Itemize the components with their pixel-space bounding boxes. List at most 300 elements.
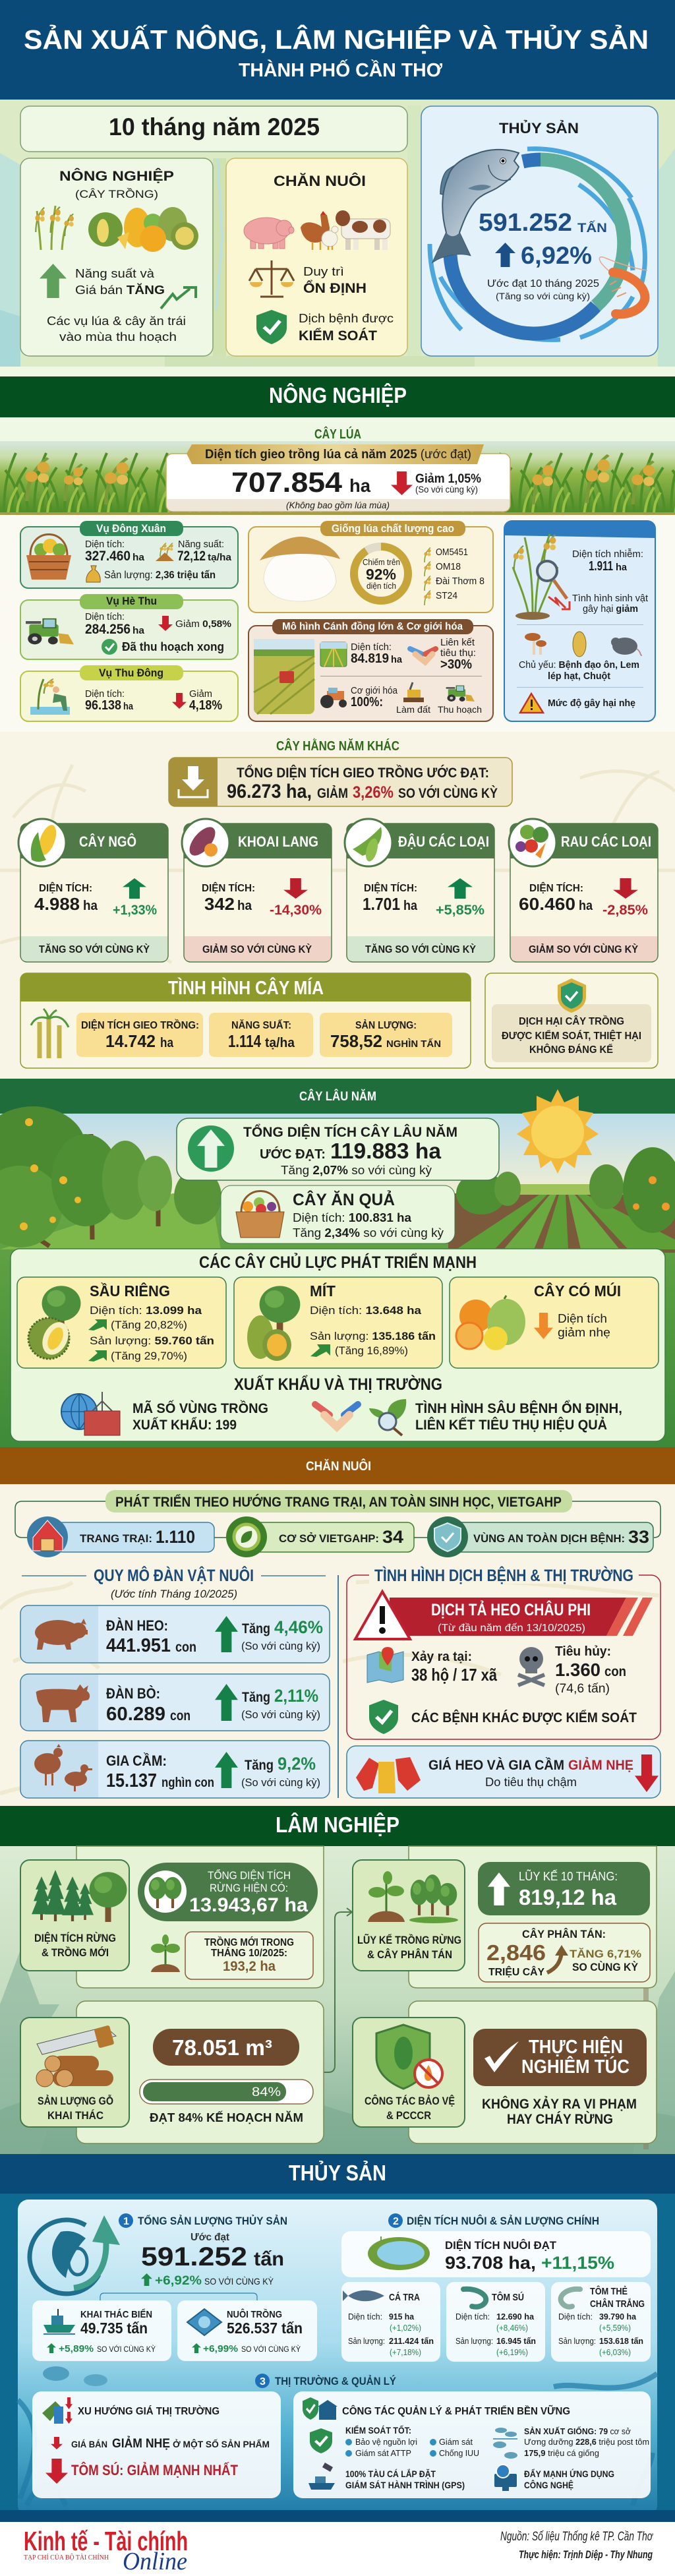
icon: pig bbox=[244, 218, 294, 249]
area value: 915 ha bbox=[389, 2312, 415, 2321]
label: Cơ giới hóa bbox=[351, 685, 398, 696]
area: Diện tích: bbox=[348, 2312, 382, 2321]
value: 526.537 tấn bbox=[227, 2320, 303, 2337]
unit: TRIỆU CÂY bbox=[488, 1965, 544, 1978]
logo bbox=[24, 2526, 188, 2575]
card: annual total bbox=[169, 758, 512, 806]
panel: vụ thu đông bbox=[20, 665, 238, 721]
card: cây ngô bbox=[18, 819, 168, 962]
output value: 16.945 tấn bbox=[496, 2336, 536, 2346]
number badge bbox=[255, 2374, 270, 2388]
icon: barn bbox=[27, 1516, 68, 1557]
sub card bbox=[353, 1860, 465, 1971]
heading: herd scale: QUY MÔ ĐÀN VẬT NUÔI bbox=[94, 1565, 254, 1585]
heading: CÔNG TÁC QUẢN LÝ & PHÁT TRIỂN BỀN VỮNG bbox=[342, 2404, 570, 2417]
card: aquaculture bbox=[177, 2300, 317, 2361]
footnote: (Không bao gồm lúa mùa) bbox=[286, 500, 390, 510]
box: yield bbox=[209, 1013, 313, 1057]
icon: cage bbox=[187, 2309, 221, 2335]
tab label: Giống lúa chất lượng cao bbox=[332, 522, 454, 535]
icon: wheat bbox=[156, 543, 174, 561]
label: & CÂY PHÂN TÁN bbox=[367, 1948, 452, 1961]
icon: sprout bbox=[151, 1934, 180, 1972]
note: SO VỚI CÙNG KỲ bbox=[97, 2344, 156, 2354]
text: price: Giá bán TĂNG bbox=[75, 283, 165, 297]
value: 193,2 ha bbox=[223, 1959, 276, 1974]
icon: down arrow bbox=[534, 1313, 553, 1339]
footer: GIẢM SO VỚI CÙNG KỲ bbox=[529, 943, 638, 955]
label: TỔNG DIỆN TÍCH bbox=[208, 1869, 291, 1882]
icon: gear leaf bbox=[226, 1516, 267, 1557]
label: CÔNG TÁC BẢO VỆ bbox=[365, 2095, 455, 2107]
panel: timber bbox=[20, 2001, 324, 2143]
percent: 6,92% bbox=[521, 242, 592, 269]
panel: vụ đông xuân bbox=[20, 521, 238, 588]
icon: boat bbox=[44, 2309, 75, 2334]
value: 34 bbox=[382, 1527, 403, 1547]
percent: +5,85% bbox=[436, 903, 484, 918]
panel: thủy sản bbox=[421, 106, 658, 356]
icon: globe container bbox=[61, 1392, 120, 1435]
card: perennial total bbox=[177, 1118, 499, 1180]
label: Xảy ra tại: bbox=[411, 1650, 472, 1664]
value: 72,12 bbox=[177, 549, 206, 564]
panel: sinh vật gây hại bbox=[504, 521, 655, 721]
note: SO VỚI CÙNG KỲ bbox=[241, 2344, 301, 2354]
area: Diện tích: 100.831 ha bbox=[293, 1211, 412, 1224]
logo: Online bbox=[123, 2548, 187, 2575]
unit: tấn bbox=[254, 2248, 284, 2270]
box: output: NGHÌN TẤN bbox=[386, 1038, 441, 1050]
text: Tình hình sinh vật bbox=[572, 593, 649, 604]
icon: shield and building bbox=[303, 2397, 338, 2420]
total value: 96.273 ha, bbox=[227, 781, 312, 802]
text: controlled: KIỂM SOÁT bbox=[299, 328, 377, 344]
icon: beans bbox=[345, 819, 392, 866]
label: TRỒNG MỚI TRONG bbox=[204, 1936, 294, 1948]
orchard background bbox=[0, 1089, 675, 1447]
text: harvest: Các vụ lúa & cây ăn trái bbox=[47, 315, 186, 328]
name: CÂY CÓ MÚI bbox=[534, 1282, 621, 1300]
sub card bbox=[353, 2018, 465, 2127]
rice field banner bbox=[0, 441, 675, 515]
icon: gear and monitor bbox=[494, 2465, 517, 2491]
icon: saw and logs bbox=[36, 2025, 116, 2087]
name: RAU CÁC LOẠI bbox=[561, 833, 651, 850]
value: 4,18% bbox=[189, 698, 222, 713]
icon: pig bbox=[35, 1619, 88, 1650]
icon: up bbox=[215, 1752, 238, 1788]
text: CÔNG NGHỆ bbox=[524, 2479, 573, 2490]
value: 4.988 bbox=[34, 894, 80, 914]
value: 1.360 bbox=[555, 1660, 601, 1680]
heading: THỊ TRƯỜNG & QUẢN LÝ bbox=[275, 2375, 397, 2387]
unit: ha bbox=[391, 654, 403, 665]
text: Ở MỘT SỐ SẢN PHẨM bbox=[173, 2438, 270, 2449]
percent: 4,46% bbox=[274, 1617, 323, 1637]
box: accumulated bbox=[478, 1862, 650, 1915]
note: (Ước tính Tháng 10/2025) bbox=[111, 1588, 237, 1600]
icon: shield bbox=[427, 1516, 468, 1557]
name: CÂY NGÔ bbox=[79, 833, 136, 850]
label: DIỆN TÍCH: bbox=[364, 882, 417, 894]
panel: period bbox=[20, 106, 407, 152]
label: DIỆN TÍCH: bbox=[529, 882, 583, 894]
section title: THỦY SẢN bbox=[289, 2161, 386, 2185]
percent: 2,11% bbox=[274, 1686, 318, 1706]
unit: ha bbox=[123, 701, 134, 712]
icon: shield bbox=[256, 310, 287, 344]
icon: download bbox=[169, 758, 218, 806]
forest background bbox=[0, 1846, 675, 2154]
label: Tiêu hủy: bbox=[555, 1644, 611, 1659]
icon: fish bbox=[343, 2291, 384, 2301]
unit: con bbox=[175, 1640, 196, 1655]
icon: check bbox=[102, 639, 117, 655]
label: DIỆN TÍCH RỪNG bbox=[34, 1932, 116, 1944]
value: 96.138 bbox=[85, 698, 121, 713]
note 2: (Tăng so với cùng kỳ) bbox=[496, 291, 590, 301]
change: (Tăng 29,70%) bbox=[111, 1350, 187, 1362]
period text: 10 tháng năm 2025 bbox=[109, 113, 320, 140]
output change: (+6,03%) bbox=[599, 2347, 631, 2357]
icon: ship with satellite bbox=[308, 2463, 335, 2490]
number badge bbox=[119, 2213, 133, 2228]
output change: (+6,19%) bbox=[496, 2347, 528, 2357]
name: MÍT bbox=[310, 1282, 336, 1300]
varieties bbox=[424, 547, 484, 605]
area: Diện tích: bbox=[558, 2312, 593, 2321]
change: Tăng 2,07% so với cùng kỳ bbox=[281, 1164, 432, 1177]
card: gia cầm bbox=[20, 1741, 330, 1798]
icon: down arrow bbox=[158, 616, 173, 631]
icon: down bbox=[613, 878, 638, 899]
section bar: thủy sản bbox=[0, 2154, 675, 2194]
value: 819,12 ha bbox=[519, 1885, 617, 1909]
icon: handshake bbox=[410, 649, 436, 662]
output: Sản lượng: bbox=[455, 2336, 493, 2346]
card: management bbox=[293, 2391, 651, 2498]
icon: trend arrow bbox=[161, 287, 196, 309]
donut value: 92% bbox=[366, 566, 396, 583]
label: tiêu thụ: bbox=[440, 647, 476, 659]
box: output: SẢN LƯỢNG: bbox=[355, 1019, 417, 1031]
panel: giống lúa bbox=[249, 521, 493, 613]
icon: farmer bbox=[30, 679, 70, 715]
icon: pond bbox=[368, 2236, 430, 2270]
icon: shrimp bbox=[463, 2289, 486, 2307]
icon: up bbox=[192, 2343, 201, 2353]
value: >30% bbox=[440, 657, 472, 672]
sub heading: cây lúa: CÂY LÚA bbox=[314, 426, 361, 442]
icon: plant with magnifier bbox=[513, 534, 567, 620]
text: falling: GIẢM NHẸ bbox=[568, 1758, 633, 1773]
tab bbox=[80, 665, 183, 680]
output change: (+7,18%) bbox=[390, 2347, 421, 2357]
unit: nghìn con bbox=[161, 1776, 214, 1790]
number badge: 2 bbox=[393, 2216, 399, 2227]
icon: chickens bbox=[301, 211, 338, 250]
icon: cow bbox=[336, 210, 390, 250]
value: 13.943,67 ha bbox=[189, 1894, 308, 1916]
note: Ước đạt 10 tháng 2025 bbox=[487, 278, 599, 289]
panel: key crops bbox=[11, 1249, 665, 1441]
stat: vietgahp bbox=[226, 1516, 414, 1557]
icon: shrimp bbox=[561, 2289, 580, 2307]
card: tôm sú bbox=[446, 2282, 545, 2362]
panel: chăn nuôi bbox=[226, 158, 407, 356]
panel: disease bbox=[347, 1565, 660, 1739]
card: fruit trees bbox=[221, 1185, 455, 1243]
text: MÃ SỐ VÙNG TRỒNG bbox=[132, 1400, 268, 1416]
unit: ha bbox=[237, 899, 252, 913]
footer: TĂNG SO VỚI CÙNG KỲ bbox=[39, 943, 150, 955]
label: ĐÀN HEO: bbox=[106, 1617, 168, 1634]
card: price trend bbox=[32, 2391, 281, 2498]
output: Sản lượng: bbox=[558, 2336, 596, 2346]
icon: excavator bbox=[403, 682, 424, 702]
icon: leaf magnifier bbox=[369, 1399, 406, 1435]
section title: CHĂN NUÔI bbox=[306, 1459, 371, 1474]
checklist: Bảo vệ nguồn lợi bbox=[355, 2437, 417, 2447]
donut note: diện tích bbox=[367, 581, 396, 591]
icon: up bbox=[123, 878, 146, 899]
icon: mushroom bbox=[525, 633, 546, 655]
icon: trend bbox=[310, 1344, 330, 1357]
label: & TRỒNG MỚI bbox=[42, 1946, 109, 1959]
icon: money bag bbox=[86, 566, 100, 582]
text: ĐẨY MẠNH ỨNG DỤNG bbox=[524, 2468, 614, 2479]
value: 327.460 bbox=[85, 549, 131, 564]
output: Sản lượng: 59.760 tấn bbox=[90, 1334, 214, 1347]
value: 33 bbox=[628, 1527, 649, 1547]
card: đàn bò bbox=[20, 1674, 330, 1731]
value: 60.289 bbox=[106, 1704, 165, 1725]
card: sầu riêng bbox=[17, 1277, 226, 1368]
note: (So với cùng kỳ) bbox=[241, 1708, 320, 1721]
progress bar bbox=[140, 2080, 313, 2104]
icon: falling arrow bbox=[548, 597, 570, 609]
text: GIÁM SÁT HÀNH TRÌNH (GPS) bbox=[345, 2480, 465, 2490]
icon: up arrow bbox=[40, 264, 67, 298]
section title: LÂM NGHIỆP bbox=[276, 1812, 399, 1837]
varieties: OM18 bbox=[436, 561, 461, 572]
text: KHÔNG XẢY RA VI PHẠM bbox=[482, 2096, 637, 2112]
output: Sản lượng: bbox=[348, 2336, 385, 2346]
value: 1.701 bbox=[363, 894, 400, 914]
output: Sản lượng: 135.186 tấn bbox=[310, 1330, 436, 1342]
unit: con bbox=[170, 1708, 191, 1723]
label: Giảm bbox=[189, 688, 212, 700]
label: DIỆN TÍCH: bbox=[202, 882, 255, 894]
text: lép hạt, Chuột bbox=[548, 671, 610, 682]
decrease note: (So với cùng kỳ) bbox=[415, 484, 478, 494]
label: CÂY PHÂN TÁN: bbox=[522, 1928, 606, 1940]
checklist bbox=[345, 2437, 479, 2458]
box: scattered trees bbox=[479, 1923, 650, 1982]
title: SẢN XUẤT NÔNG, LÂM NGHIỆP VÀ THỦY SẢN bbox=[24, 24, 649, 55]
icon: tractor bbox=[320, 688, 347, 708]
section 2: area and output bbox=[341, 2213, 651, 2362]
icon: basket bbox=[26, 534, 71, 580]
section 3: market and management bbox=[32, 2374, 651, 2498]
ocean background bbox=[0, 2194, 675, 2522]
box: output bbox=[320, 1013, 452, 1057]
card: farming area bbox=[341, 2231, 651, 2277]
unit: con bbox=[604, 1664, 626, 1679]
panel: nông nghiệp bbox=[20, 158, 213, 356]
sub heading band bbox=[0, 417, 675, 442]
icon: sweet potato bbox=[182, 819, 229, 866]
icon: warning bbox=[355, 1592, 410, 1639]
text: GIẢM NHẸ bbox=[112, 2436, 170, 2451]
icon: map bbox=[367, 1647, 403, 1683]
icon: trend bbox=[88, 1319, 107, 1331]
area change: (+5,59%) bbox=[599, 2323, 631, 2333]
icon: price tags bbox=[356, 1757, 421, 1793]
icon: down arrow bbox=[51, 2437, 63, 2449]
number badge bbox=[388, 2213, 403, 2228]
text: stable bold: ỔN ĐỊNH bbox=[303, 280, 367, 296]
label and output: Sản lượng: 2,36 triệu tấn bbox=[104, 570, 216, 581]
tab bbox=[80, 594, 183, 609]
checklist: Giám sát bbox=[439, 2437, 473, 2447]
icon: durian bbox=[28, 1286, 80, 1359]
area value: 39.790 ha bbox=[599, 2312, 637, 2321]
icon: shrimp bbox=[599, 257, 647, 314]
label: DIỆN TÍCH: bbox=[39, 882, 92, 894]
logo: TẠP CHÍ CỦA BỘ TÀI CHÍNH bbox=[24, 2554, 109, 2561]
icon: vegetables bbox=[509, 819, 556, 866]
icon: up bbox=[448, 878, 473, 899]
section title: CÂY LÂU NĂM bbox=[299, 1089, 376, 1104]
overview section with map background bbox=[0, 100, 675, 367]
label: & PCCCR bbox=[386, 2109, 431, 2122]
panel: cây mía bbox=[20, 973, 471, 1068]
rice details background bbox=[0, 515, 675, 732]
text: harvest 2: vào mùa thu hoạch bbox=[59, 330, 177, 344]
tab label: Mô hình Cánh đồng lớn & Cơ giới hóa bbox=[282, 621, 463, 632]
name: SẦU RIÊNG bbox=[90, 1282, 170, 1300]
varieties: Đài Thơm 8 bbox=[436, 576, 484, 587]
stat: trang trại bbox=[27, 1516, 214, 1557]
connector arrow bbox=[324, 1908, 352, 2072]
varieties: OM5451 bbox=[436, 547, 468, 558]
note: (So với cùng kỳ) bbox=[241, 1776, 320, 1789]
box: new planting bbox=[185, 1932, 313, 1979]
card: khoai lang bbox=[182, 819, 332, 962]
percent: +6,99% bbox=[203, 2343, 238, 2354]
ring chart bbox=[430, 149, 645, 340]
icon: citrus bbox=[456, 1296, 525, 1350]
label: Năng suất: bbox=[178, 539, 224, 550]
footer: TĂNG SO VỚI CÙNG KỲ bbox=[365, 943, 476, 955]
unit: ha bbox=[349, 475, 370, 496]
heading: CÁC CÂY CHỦ LỰC PHÁT TRIỂN MẠNH bbox=[199, 1252, 477, 1272]
output value: 153.618 tấn bbox=[599, 2336, 643, 2346]
card: rau bbox=[509, 819, 658, 962]
note: ĐẠT 84% KẾ HOẠCH NĂM bbox=[150, 2111, 303, 2124]
text: disease: Dịch bệnh được bbox=[299, 312, 394, 325]
heading: TỔNG SẢN LƯỢNG THỦY SẢN bbox=[138, 2215, 287, 2227]
area: Diện tích: 13.648 ha bbox=[310, 1304, 422, 1317]
value: 100%: bbox=[351, 695, 383, 709]
text: stable: Duy trì bbox=[303, 265, 344, 278]
text: 100% TÀU CÁ LẮP ĐẶT bbox=[345, 2468, 436, 2479]
subtitle: THÀNH PHỐ CẦN THƠ bbox=[239, 59, 442, 81]
box: output: 758,52 bbox=[330, 1031, 382, 1051]
text: giảm nhẹ bbox=[558, 1326, 610, 1339]
name: ĐẬU CÁC LOẠI bbox=[398, 833, 489, 850]
checklist: Chống IUU bbox=[439, 2448, 479, 2458]
label: Tăng bbox=[242, 1690, 270, 1705]
note: (So với cùng kỳ) bbox=[241, 1640, 320, 1652]
percent: +11,15% bbox=[541, 2253, 614, 2273]
status: Đã thu hoạch xong bbox=[122, 640, 224, 653]
percent: +6,92% bbox=[155, 2274, 202, 2288]
unit: tạ/ha bbox=[208, 552, 232, 563]
label: SẢN LƯỢNG GỖ bbox=[38, 2095, 113, 2107]
label: LŨY KẾ TRỒNG RỪNG bbox=[357, 1933, 461, 1946]
label: Tăng bbox=[242, 1621, 270, 1636]
icon: fish seed bbox=[493, 2428, 517, 2459]
label: GIẢM bbox=[317, 786, 348, 801]
label: Diện tích: bbox=[85, 611, 125, 622]
heading: TỔNG DIỆN TÍCH CÂY LÂU NĂM bbox=[243, 1124, 457, 1140]
value: 1.110 bbox=[156, 1527, 195, 1547]
area: Diện tích: bbox=[455, 2312, 490, 2321]
label: LŨY KẾ 10 THÁNG: bbox=[519, 1869, 618, 1883]
sub heading: CÂY HẰNG NĂM KHÁC bbox=[276, 738, 399, 754]
box: yield: 1.114 bbox=[228, 1031, 261, 1051]
panel: forest area bbox=[20, 1846, 324, 1988]
tab bbox=[80, 521, 183, 536]
section 1: total bbox=[30, 2213, 317, 2361]
name: CÁ TRA bbox=[389, 2292, 420, 2303]
value: 15.137 bbox=[106, 1770, 157, 1791]
banner note: (Từ đầu năm đến 13/10/2025) bbox=[438, 1623, 585, 1634]
checklist: Giám sát ATTP bbox=[355, 2448, 411, 2458]
note: (74,6 tấn) bbox=[555, 1682, 610, 1696]
label: Diện tích: bbox=[85, 539, 125, 550]
label: TRANG TRẠI: bbox=[80, 1532, 152, 1545]
panel: protection bbox=[353, 2001, 657, 2143]
card: cây có múi bbox=[450, 1277, 659, 1368]
text: CÁC BỆNH KHÁC ĐƯỢC KIỂM SOÁT bbox=[411, 1710, 637, 1725]
unit: ha bbox=[83, 899, 98, 913]
footer bbox=[0, 2522, 675, 2576]
number badge: 3 bbox=[260, 2376, 266, 2387]
label: Tăng bbox=[245, 1758, 274, 1773]
section title: NÔNG NGHIỆP bbox=[269, 382, 407, 407]
text: HAY CHÁY RỪNG bbox=[507, 2111, 613, 2127]
area change: (+8,46%) bbox=[496, 2323, 528, 2333]
icon: skull bbox=[518, 1647, 544, 1685]
connector lines bbox=[15, 1501, 660, 1538]
area: Diện tích: 13.099 ha bbox=[90, 1304, 202, 1317]
value: 38 hộ / 17 xã bbox=[411, 1665, 497, 1685]
card: cá tra bbox=[341, 2282, 440, 2362]
change: Tăng 2,34% so với cùng kỳ bbox=[293, 1226, 444, 1240]
label: KHAI THÁC bbox=[47, 2109, 103, 2122]
icon: handshake bbox=[315, 1404, 358, 1427]
banner: direction: PHÁT TRIỂN THEO HƯỚNG TRANG TRẠI, AN TOÀN SINH HỌC, VIETGAHP bbox=[115, 1494, 562, 1510]
icon: harvester bbox=[26, 619, 74, 644]
icon: trees bbox=[32, 1870, 127, 1922]
heading: XU HƯỚNG GIÁ THỊ TRƯỜNG bbox=[78, 2405, 220, 2417]
donut chart bbox=[354, 547, 408, 601]
icon: shield with leaf bbox=[376, 2025, 442, 2089]
